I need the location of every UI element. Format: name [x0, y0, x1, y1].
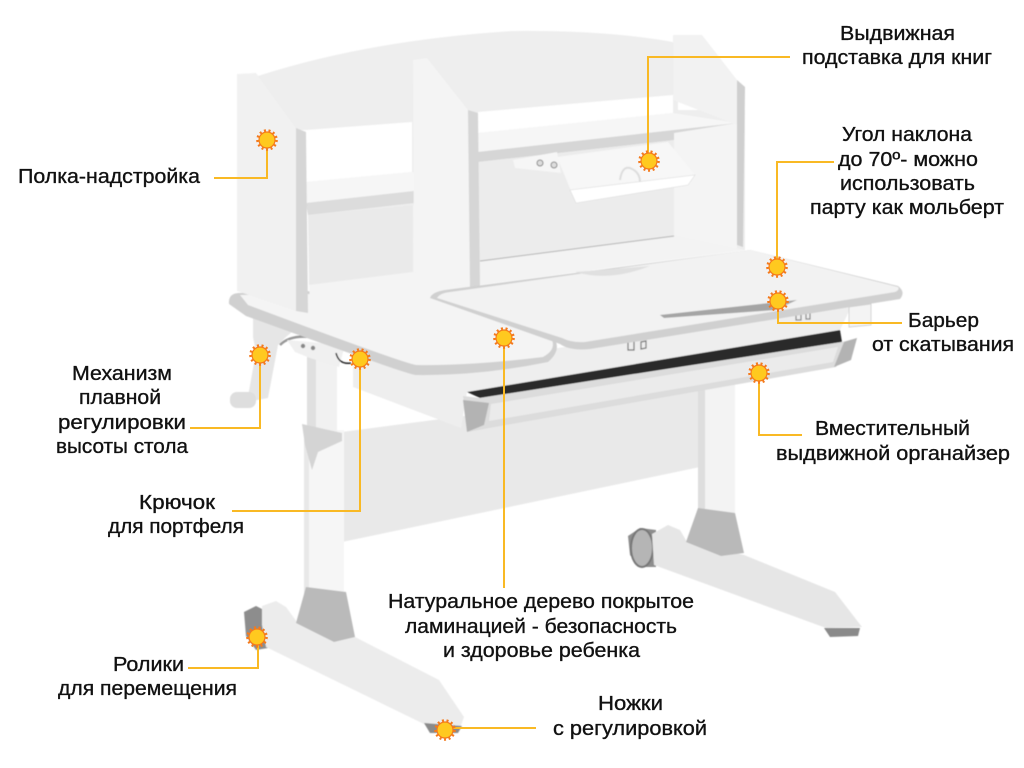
- marker: barrier: [768, 292, 788, 310]
- marker: book stand: [640, 152, 658, 170]
- label: height mechanism: высоты стола: [56, 435, 189, 458]
- left hutch side panel: [237, 73, 308, 313]
- label: tilt angle: парту как мольберт: [810, 196, 1005, 219]
- label: rollers: для перемещения: [58, 677, 237, 700]
- marker: rollers: [248, 628, 266, 646]
- label: tilt angle: до 70º- можно: [838, 148, 978, 171]
- label: feet: с регулировкой: [553, 717, 707, 740]
- label: drawer: [776, 417, 1010, 465]
- tilting tabletop: [430, 250, 903, 349]
- label: book stand: подставка для книг: [802, 46, 992, 69]
- marker: shelf: [258, 130, 276, 150]
- label: tilt angle: [810, 123, 1005, 219]
- middle divider: [413, 58, 480, 290]
- left tabletop: [229, 288, 557, 375]
- crossbar panel: [342, 385, 700, 542]
- label: book stand: [802, 22, 992, 69]
- label: tilt angle: использовать: [840, 172, 975, 195]
- label: feet: Ножки: [598, 692, 663, 715]
- label: barrier: Барьер: [908, 309, 979, 332]
- label: barrier: [872, 309, 1014, 356]
- marker: hook: [350, 350, 370, 368]
- label: feet: [553, 692, 707, 740]
- right shelf: [478, 113, 745, 285]
- marker: crank: [250, 346, 270, 364]
- label: height mechanism: плавной: [79, 386, 161, 409]
- crank and bracket: [230, 315, 345, 408]
- label: height mechanism: Механизм: [72, 362, 172, 385]
- hutch back panel: [258, 31, 745, 290]
- marker: drawer: [750, 364, 768, 382]
- label: hook: Крючок: [139, 491, 216, 514]
- label: drawer: Вместительный: [815, 417, 970, 440]
- label: natural wood: Натуральное дерево покрытое: [388, 590, 694, 613]
- label: tilt angle: Угол наклона: [842, 123, 973, 146]
- label: height mechanism: регулировки: [58, 411, 186, 434]
- label: barrier: от скатывания: [872, 333, 1014, 356]
- leader lines: [188, 57, 902, 728]
- label: shelf: Полка-надстройка: [18, 165, 201, 188]
- label: drawer: выдвижной органайзер: [776, 442, 1010, 465]
- label: natural wood: ламинацией - безопасность: [405, 615, 677, 638]
- label: rollers: Ролики: [113, 653, 184, 676]
- left leg: [244, 350, 464, 733]
- label: hook: [108, 491, 244, 538]
- label: height mechanism: [56, 362, 189, 458]
- marker: wood: [494, 328, 514, 348]
- label: rollers: [58, 653, 237, 700]
- desk illustration: [229, 31, 903, 733]
- label: natural wood: [388, 590, 694, 662]
- left shelf: [306, 172, 470, 302]
- right divider: [673, 35, 745, 247]
- desk apron and drawer: [336, 304, 871, 432]
- marker: tilt: [768, 258, 786, 276]
- sliding book stand: [513, 142, 695, 203]
- label: hook: для портфеля: [108, 515, 244, 538]
- hutch white openings: [306, 95, 673, 182]
- label: book stand: Выдвижная: [840, 22, 955, 45]
- right leg: [628, 380, 862, 637]
- marker: feet: [436, 720, 454, 740]
- label: natural wood: и здоровье ребенка: [443, 639, 641, 662]
